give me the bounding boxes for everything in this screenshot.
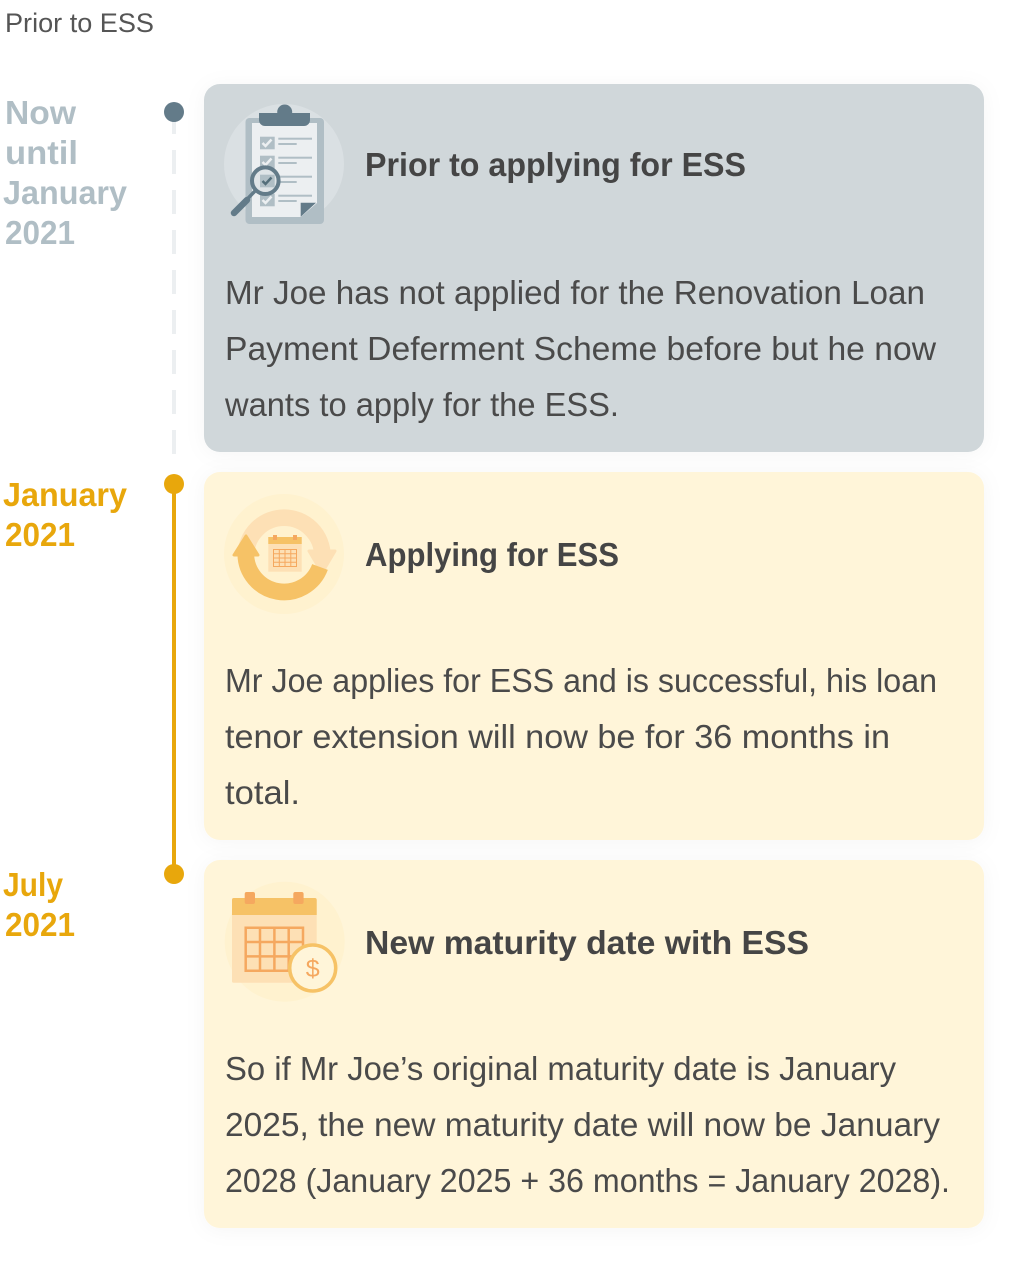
label: Now until January 2021: Now [5, 94, 76, 131]
title: Applying for ESS [365, 536, 619, 573]
label: July 2021: July [3, 866, 64, 903]
label: January 2021: January [3, 476, 128, 513]
body text: Mr Joe has not applied for the Renovation Loan [225, 274, 925, 311]
body text: 2028 (January 2025 + 36 months = January 2028). [225, 1162, 950, 1199]
heading: Prior to ESS: Prior to ESS [5, 8, 154, 38]
label: January 2021 [3, 476, 128, 553]
icon: circular arrows with calendar [224, 494, 344, 614]
label: Now until January 2021: January [3, 174, 128, 211]
label: Now until January 2021: until [5, 134, 78, 171]
body text: wants to apply for the ESS. [224, 386, 619, 423]
body text [225, 1050, 950, 1199]
timeline [164, 102, 184, 884]
panel: new maturity date [204, 860, 984, 1228]
body text: 2025, the new maturity date will now be January [225, 1106, 940, 1143]
label: Now until January 2021: 2021 [5, 214, 75, 251]
icon: calendar with dollar coin [225, 882, 345, 1002]
body text: Payment Deferment Scheme before but he now [225, 330, 936, 367]
label: July 2021: 2021 [5, 906, 75, 943]
icon: calendar with dollar coin: $ [306, 955, 320, 983]
body text [225, 662, 937, 811]
label: January 2021: 2021 [5, 516, 75, 553]
body text: So if Mr Joe’s original maturity date is January [225, 1050, 896, 1087]
panel: prior to applying [204, 84, 984, 452]
body text: total. [225, 774, 300, 811]
body text [224, 274, 936, 423]
label: July 2021 [3, 866, 75, 943]
title: Prior to applying for ESS [365, 146, 746, 183]
body text: Mr Joe applies for ESS and is successful, his loan [225, 662, 937, 699]
panel: applying for ESS [204, 472, 984, 840]
title: New maturity date with ESS [365, 924, 809, 961]
icon: clipboard with magnifier [224, 104, 344, 224]
label: Now until January 2021 [3, 94, 128, 251]
body text: tenor extension will now be for 36 months in [225, 718, 890, 755]
